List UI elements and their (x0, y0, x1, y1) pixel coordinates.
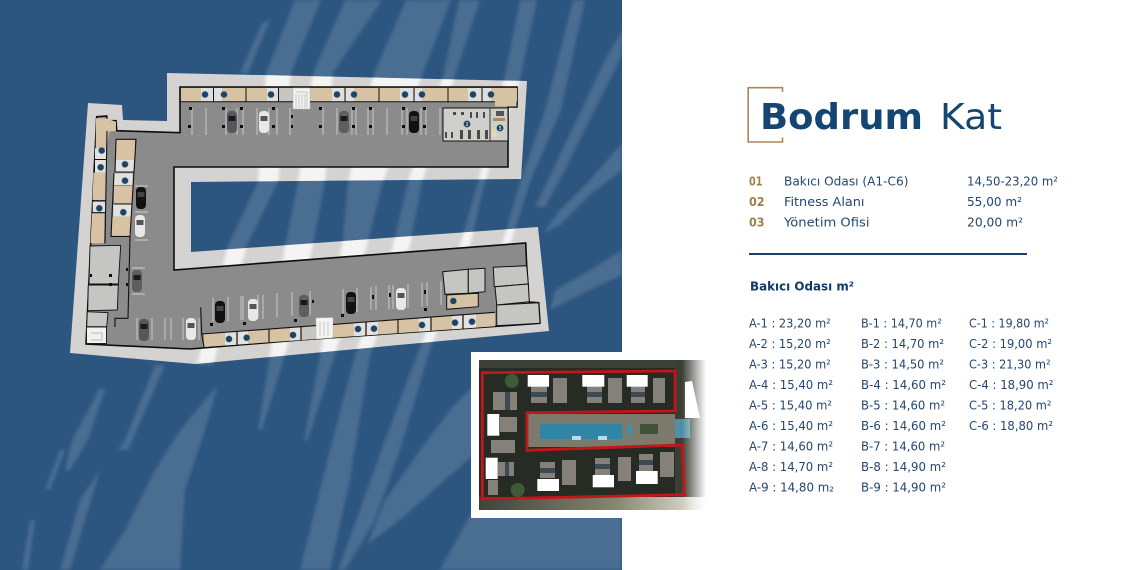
right edge fade (682, 360, 706, 510)
table column: A rooms: A-6 : 15,40 m² (749, 418, 833, 433)
legend row 03 (749, 215, 1023, 230)
floor plan: basement level (70, 73, 549, 364)
table column: C rooms: C-5 : 18,20 m² (969, 398, 1052, 412)
table column: B rooms: B-5 : 14,60 m² (861, 398, 945, 412)
table column: B rooms: B-4 : 14,60 m² (861, 377, 946, 392)
table column: C rooms: C-2 : 19,00 m² (969, 336, 1052, 351)
title: Bodrum (760, 97, 923, 138)
legend row 02: 02 (749, 194, 764, 209)
table column: B rooms: B-8 : 14,90 m² (861, 459, 946, 474)
houses (488, 378, 674, 495)
badge: office 03: 3 (498, 126, 502, 132)
caretaker rooms: top row (180, 88, 517, 109)
concrete slab surround (70, 73, 549, 364)
inset: aerial site plan (471, 352, 706, 518)
service rooms: lower left (86, 245, 121, 344)
red zone outline (482, 371, 684, 499)
table column: C rooms: C-4 : 18,90 m² (969, 377, 1054, 392)
table column: B rooms: B-1 : 14,70 m² (861, 316, 942, 330)
title: Kat (940, 97, 1002, 138)
fitness area and management office (443, 108, 508, 141)
house shadows (505, 392, 653, 476)
caretaker rooms: left columns (90, 118, 136, 327)
legend row 02: Fitness Alanı (784, 194, 864, 209)
legend row 01: 01 (749, 174, 762, 189)
room number badges (96, 91, 494, 342)
title frame: gold bracket (748, 88, 782, 142)
badge: fitness 02: 2 (465, 122, 469, 128)
table column: B rooms (861, 316, 946, 494)
table column: A rooms: A-7 : 14,60 m² (749, 438, 833, 454)
trees (505, 374, 519, 388)
table column: B rooms: B-6 : 14,60 m² (861, 418, 946, 433)
table column: A rooms: A-8 : 14,70 m² (749, 459, 833, 474)
legend row 01: Bakıcı Odası (A1-C6) (784, 174, 908, 189)
title (760, 97, 1002, 138)
table column: B rooms: B-7 : 14,60 m² (861, 438, 945, 454)
table column: A rooms: A-4 : 15,40 m² (749, 377, 833, 392)
panel: blue background with palm shadows (0, 0, 622, 570)
legend row 01 (749, 174, 1058, 189)
service rooms: lower right (443, 266, 540, 326)
table column: A rooms: A-3 : 15,20 m² (749, 356, 831, 372)
aerial image (479, 360, 706, 510)
table column: B rooms: B-2 : 14,70 m² (861, 336, 944, 351)
table column: B rooms: B-9 : 14,90 m² (861, 480, 946, 494)
table column: C rooms: C-1 : 19,80 m² (969, 316, 1049, 330)
legend: room areas (749, 174, 1058, 230)
table column: A rooms: A-5 : 15,40 m² (749, 398, 832, 412)
heading: caretaker room areas: Bakıcı Odası m² (750, 278, 854, 294)
caretaker rooms: bottom row (201, 307, 495, 347)
parking lines (132, 108, 441, 340)
table column: C rooms: C-6 : 18,80 m² (969, 418, 1053, 433)
table column: C rooms (969, 316, 1054, 433)
legend row 03: Yönetim Ofisi (783, 215, 870, 230)
table column: A rooms: A-1 : 23,20 m² (749, 316, 831, 330)
legend row 01: 14,50-23,20 m² (967, 174, 1058, 189)
table column: A rooms (749, 316, 834, 494)
structural columns (90, 107, 427, 326)
table column: B rooms: B-3 : 14,50 m² (861, 356, 944, 372)
table column: C rooms: C-3 : 21,30 m² (969, 356, 1050, 372)
inset white frame (471, 352, 622, 518)
legend row 02 (749, 194, 1022, 209)
parked cars (132, 111, 419, 341)
legend row 02: 55,00 m² (967, 194, 1022, 209)
table column: A rooms: A-2 : 15,20 m² (749, 336, 831, 351)
parking floor (86, 87, 540, 349)
table column: A rooms: A-9 : 14,80 m₂ (749, 480, 834, 494)
white roofs (486, 375, 700, 491)
legend row 03: 20,00 m² (967, 215, 1023, 230)
legend row 03: 03 (749, 215, 764, 230)
